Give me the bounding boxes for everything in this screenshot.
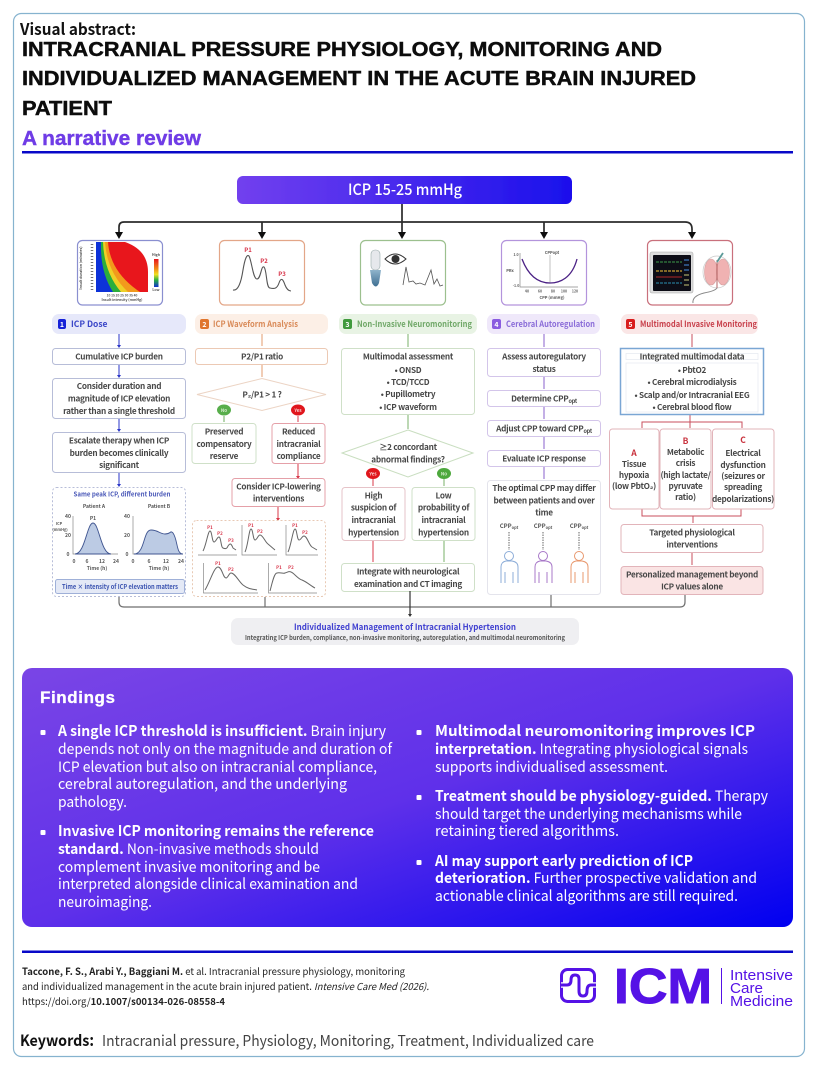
box C: electrical dysfunction: (seizures or bbox=[721, 470, 765, 482]
box: integrated multimodal data: • PbtO2 bbox=[678, 364, 707, 376]
box: adjust CPP: opt bbox=[583, 427, 593, 435]
waveform 3: P2 bbox=[302, 530, 308, 536]
pill: no bbox=[437, 468, 451, 479]
box: multimodal assessment: • TCD/TCCD bbox=[387, 376, 430, 388]
box: optimal CPP may differ bbox=[488, 480, 600, 594]
icon card: ICP waveform: P3 bbox=[278, 269, 286, 278]
header pill 4: 4 bbox=[494, 320, 499, 330]
box: determine CPPopt: Determine CPP bbox=[511, 392, 569, 404]
box: cumulative burden bbox=[52, 348, 186, 364]
finding 2 bbox=[40, 820, 374, 912]
box: low probability bbox=[412, 488, 475, 540]
icon card: CPPopt curve: 1.0 bbox=[513, 253, 519, 258]
box B: metabolic crisis: (high lactate/ bbox=[660, 469, 711, 481]
column 2: ICP waveform analysis bbox=[192, 314, 328, 596]
box: escalate therapy: Escalate therapy when ICP bbox=[69, 434, 170, 446]
chart: patient B: 6 bbox=[148, 558, 151, 565]
box: P2/P1 ratio bbox=[196, 348, 328, 364]
icon card: ICP dose heatmap bbox=[78, 240, 162, 305]
box: adjust CPP: Adjust CPP toward CPP bbox=[496, 422, 583, 434]
panel: waveform examples bbox=[192, 520, 326, 596]
finding 1: cerebral autoregulation, and the underlying bbox=[58, 773, 347, 794]
converging connector to summary bbox=[119, 591, 685, 617]
box C: electrical dysfunction: dysfunction bbox=[720, 459, 766, 471]
chart: patient B: 20 bbox=[124, 532, 130, 539]
citation: and individualized management in the acute brain injured patient. Intensive Care Med (2026). bbox=[22, 979, 429, 993]
waveform 3: P1 bbox=[292, 523, 298, 529]
logo wordmark: ICM bbox=[614, 960, 712, 1014]
waveform 5: P2 bbox=[288, 565, 294, 571]
box: low probability: Low bbox=[436, 490, 452, 502]
heading: findings: Findings bbox=[40, 688, 115, 707]
column 4 arrows bbox=[543, 334, 545, 479]
box: reduced compliance bbox=[272, 424, 325, 464]
column 5: multimodal invasive monitoring bbox=[610, 314, 774, 594]
icon card: ICP dose heatmap: High bbox=[152, 253, 160, 258]
waveform 1 bbox=[198, 525, 237, 555]
box: multimodal assessment: • ONSD bbox=[395, 364, 422, 376]
pill: no: No bbox=[441, 472, 447, 478]
finding 2: interpreted alongside clinical examination and bbox=[58, 873, 358, 894]
logo text: Care bbox=[730, 980, 763, 997]
icon card: ICP waveform: P2 bbox=[260, 256, 268, 265]
box A: tissue hypoxia bbox=[610, 429, 659, 509]
box C: electrical dysfunction bbox=[712, 429, 774, 509]
citation bbox=[22, 964, 429, 1008]
box: personalized management: Personalized management beyond bbox=[626, 568, 758, 580]
summary pill: Integrating ICP burden, compliance, non-invasive monitoring, autoregulation, and multimodal neuromonitoring bbox=[245, 632, 565, 642]
column 3: non-invasive neuromonitoring bbox=[339, 314, 477, 592]
box: personalized management bbox=[621, 566, 763, 594]
finding 3: Multimodal neuromonitoring improves ICP bbox=[435, 720, 755, 741]
column 1 arrows bbox=[117, 334, 121, 487]
column 4: cerebral autoregulation bbox=[487, 314, 600, 594]
box: evaluate response bbox=[488, 450, 600, 466]
person: blue: opt bbox=[512, 525, 519, 531]
box: multimodal assessment: • Pupillometry bbox=[381, 388, 436, 400]
keywords: Keywords: bbox=[20, 1029, 94, 1051]
box: evaluate response: Evaluate ICP response bbox=[502, 452, 586, 464]
chart: patient A: 0 bbox=[73, 558, 76, 565]
box B: metabolic crisis: Metabolic bbox=[667, 446, 705, 458]
finding 4: retaining tiered algorithms. bbox=[435, 820, 619, 841]
finding 5: actionable clinical algorithms are still required. bbox=[435, 885, 738, 906]
decision: P2/P1 > 1 bbox=[197, 378, 326, 410]
box: determine CPPopt bbox=[488, 390, 600, 406]
box: low probability: intracranial bbox=[422, 514, 466, 526]
chart: patient A bbox=[52, 513, 119, 572]
box: high suspicion: High bbox=[365, 490, 382, 502]
callout: time x intensity: Time × intensity of ICP elevation matters bbox=[62, 581, 178, 591]
box: ICP-lowering bbox=[232, 478, 325, 506]
waveform 1: P1 bbox=[207, 525, 213, 531]
box: integrate: Integrate with neurological bbox=[357, 566, 460, 578]
box: targeted interventions: Targeted physiological bbox=[649, 526, 735, 538]
box: high suspicion: intracranial bbox=[352, 514, 396, 526]
header pill 2: 2 bbox=[202, 320, 207, 330]
person: blue bbox=[500, 521, 519, 583]
icon card: ICP dose heatmap: 10 15 20 25 30 35 40 bbox=[107, 292, 137, 298]
box: escalate therapy: significant bbox=[99, 459, 140, 471]
waveform 1: P2 bbox=[217, 531, 223, 537]
waveform 4: P1 bbox=[215, 561, 221, 567]
box: adjust CPP bbox=[488, 420, 600, 436]
top box: ICP range: ICP 15-25 mmHg bbox=[348, 178, 462, 200]
subtitle: A narrative review bbox=[22, 128, 201, 150]
waveform 3 bbox=[286, 523, 318, 555]
header pill 3: 3 bbox=[345, 320, 350, 330]
person: blue: CPP bbox=[500, 521, 512, 530]
header pill 2: ICP Waveform Analysis bbox=[213, 318, 298, 330]
icon card: CPPopt curve: 120 bbox=[572, 290, 578, 294]
header pill 5 bbox=[621, 314, 758, 334]
panel: same peak, different burden: Patient B bbox=[148, 503, 171, 510]
box: ICP-lowering: interventions bbox=[253, 492, 304, 504]
finding 4: Treatment should be physiology-guided. Therapy bbox=[435, 785, 768, 806]
finding 2: standard. Non-invasive methods should bbox=[58, 838, 319, 859]
box C: electrical dysfunction: Electrical bbox=[725, 447, 761, 459]
chart: patient A: (mmHg) bbox=[52, 528, 68, 533]
icon card: ICP dose heatmap: Low bbox=[152, 288, 160, 293]
box: cumulative burden: Cumulative ICP burden bbox=[75, 350, 163, 362]
box: multimodal assessment: • ICP waveform bbox=[379, 401, 437, 413]
finding 3: supports individualised assessment. bbox=[435, 756, 668, 777]
chart: patient A: 12 bbox=[99, 558, 105, 565]
box C: electrical dysfunction: C bbox=[740, 434, 746, 446]
waveform 1: P3 bbox=[228, 538, 234, 544]
branching arrows from top box bbox=[115, 204, 696, 239]
icon card: ICP dose heatmap: Insult intensity (mmHg) bbox=[102, 298, 143, 303]
chart: patient A: 40 bbox=[65, 513, 71, 520]
header pill 3 bbox=[339, 314, 477, 334]
box: duration and magnitude: magnitude of ICP elevation bbox=[68, 392, 170, 404]
chart: patient A: P1 bbox=[90, 515, 96, 522]
waveform 2: P1 bbox=[248, 523, 254, 529]
chart: patient B: 40 bbox=[124, 513, 130, 520]
icon card: monitor and brain bbox=[648, 240, 732, 305]
citation: https://doi.org/10.1007/s00134-026-08558-4 bbox=[22, 994, 225, 1008]
pill: yes bbox=[366, 468, 380, 479]
header pill 4: Cerebral Autoregulation bbox=[506, 318, 595, 330]
pill: no bbox=[217, 404, 231, 416]
box: integrated multimodal data: • Scalp and/or Intracranial EEG bbox=[635, 389, 750, 401]
box: determine CPPopt: opt bbox=[569, 397, 578, 405]
box: multimodal assessment: Multimodal assessment bbox=[363, 350, 454, 362]
icon card: ultrasound probe, eye and waveform bbox=[360, 240, 446, 305]
icon card: ICP waveform bbox=[220, 240, 304, 305]
box A: tissue hypoxia: (low PbtO₂) bbox=[612, 480, 656, 492]
box: integrated multimodal data: • Cerebral blood flow bbox=[653, 401, 732, 413]
waveform 5 bbox=[268, 563, 317, 593]
header pill 2 bbox=[195, 314, 328, 334]
column 5 arrows bbox=[642, 334, 742, 565]
column 3 arrows bbox=[373, 334, 444, 562]
box: duration and magnitude bbox=[52, 378, 186, 418]
finding 1: pathology. bbox=[58, 791, 127, 812]
box C: electrical dysfunction: spreading bbox=[724, 481, 762, 493]
column 2 arrows bbox=[224, 334, 300, 521]
box: integrated multimodal data bbox=[620, 348, 764, 414]
citation: Taccone, F. S., Arabi Y., Baggiani M. et al. Intracranial pressure physiology, monitoring bbox=[22, 964, 406, 978]
box: escalate therapy bbox=[52, 432, 186, 472]
header: visual abstract label and title bbox=[19, 16, 696, 150]
box: multimodal assessment bbox=[342, 348, 474, 414]
chart: patient A: Time (h) bbox=[87, 565, 107, 572]
icon card: CPPopt curve: CPP (mmHg) bbox=[539, 295, 565, 301]
finding 4 bbox=[416, 785, 768, 841]
finding 5: deterioration. Further prospective validation and bbox=[435, 867, 757, 888]
finding 3 bbox=[416, 720, 755, 777]
icon card: CPPopt curve: 60 bbox=[538, 290, 542, 294]
box C: electrical dysfunction: depolarizations) bbox=[712, 493, 774, 505]
header pill 1: 1 bbox=[60, 320, 64, 330]
pill: yes: Yes bbox=[293, 408, 302, 414]
flowchart bbox=[52, 176, 774, 645]
person: orange: CPP bbox=[570, 521, 582, 530]
box: low probability: probability of bbox=[418, 502, 470, 514]
box: preserved reserve: reserve bbox=[210, 450, 239, 462]
finding 1 bbox=[40, 720, 393, 812]
box: integrate: examination and CT imaging bbox=[354, 578, 462, 590]
box: reduced compliance: compliance bbox=[277, 450, 321, 462]
panel: same peak, different burden bbox=[52, 488, 186, 596]
header pill 4 bbox=[487, 314, 600, 334]
box: duration and magnitude: rather than a single threshold bbox=[63, 405, 175, 417]
box: targeted interventions: interventions bbox=[666, 538, 718, 550]
box: integrated multimodal data: Integrated multimodal data bbox=[640, 350, 745, 362]
icon card: CPPopt curve: 80 bbox=[551, 290, 555, 294]
icon card: CPPopt curve: -1.0 bbox=[513, 284, 519, 289]
box B: metabolic crisis: pyruvate bbox=[669, 480, 703, 492]
chart: patient B: 24 bbox=[178, 558, 184, 565]
chart: patient B bbox=[124, 513, 184, 572]
finding 4: should target the underlying mechanisms while bbox=[435, 803, 742, 824]
decision: concordant findings bbox=[342, 430, 473, 477]
box A: tissue hypoxia: hypoxia bbox=[619, 469, 650, 481]
box: reduced compliance: intracranial bbox=[277, 438, 321, 450]
icon card: CPPopt curve: CPPopt bbox=[545, 250, 560, 256]
box A: tissue hypoxia: A bbox=[630, 447, 637, 459]
logo text: Medicine bbox=[730, 993, 793, 1010]
waveform 2 bbox=[242, 523, 277, 555]
panel: findings bbox=[22, 668, 793, 927]
box: optimal CPP may differ: between patients and over bbox=[493, 494, 595, 506]
icon card: CPPopt curve: PRx bbox=[506, 268, 515, 274]
box: assess status bbox=[488, 348, 600, 376]
header pill 5: 5 bbox=[628, 320, 633, 330]
box B: metabolic crisis: ratio) bbox=[675, 491, 696, 503]
finding 2: neuroimaging. bbox=[58, 891, 152, 912]
waveform 5: P1 bbox=[276, 565, 282, 571]
panel: same peak, different burden: Same peak ICP, different burden bbox=[74, 488, 170, 498]
header pill 5: Multimodal Invasive Monitoring bbox=[640, 318, 757, 330]
box B: metabolic crisis bbox=[660, 429, 711, 509]
logo text bbox=[730, 967, 793, 1010]
top box: ICP range bbox=[237, 176, 572, 204]
decision: P2/P1 > 1: P₂/P1 > 1 ? bbox=[242, 388, 282, 400]
box: low probability: hypertension bbox=[418, 526, 469, 538]
title line 1: INTRACRANIAL PRESSURE PHYSIOLOGY, MONITORING AND bbox=[22, 39, 662, 61]
box B: metabolic crisis: crisis bbox=[676, 457, 695, 469]
box: optimal CPP may differ: The optimal CPP may differ bbox=[492, 482, 596, 494]
pill: yes bbox=[291, 404, 305, 416]
box: P2/P1 ratio: P2/P1 ratio bbox=[241, 350, 283, 362]
finding 2: Invasive ICP monitoring remains the reference bbox=[58, 820, 374, 841]
chart: patient B: 12 bbox=[163, 558, 169, 565]
person: orange bbox=[570, 521, 589, 583]
box: escalate therapy: burden becomes clinically bbox=[70, 447, 169, 459]
finding 3: interpretation. Integrating physiological signals bbox=[435, 738, 748, 759]
chart: patient B: 0 bbox=[126, 551, 129, 558]
panel: same peak, different burden: Patient A bbox=[83, 503, 106, 510]
waveform 4 bbox=[204, 561, 258, 593]
box B: metabolic crisis: B bbox=[683, 435, 689, 447]
box: ICP-lowering: Consider ICP-lowering bbox=[236, 480, 321, 492]
pill: yes: Yes bbox=[368, 472, 377, 478]
finding 1: A single ICP threshold is insufficient. Brain injury bbox=[57, 720, 386, 741]
chart: patient A: ICP bbox=[56, 522, 63, 527]
keywords: Intracranial pressure, Physiology, Monitoring, Treatment, Individualized care bbox=[102, 1030, 594, 1051]
chart: patient B: 0 bbox=[132, 558, 135, 565]
box: preserved reserve: compensatory bbox=[197, 438, 252, 450]
logo: ICM Intensive Care Medicine bbox=[561, 960, 793, 1014]
chart: patient A: 24 bbox=[113, 558, 119, 565]
box: assess status: Assess autoregulatory bbox=[501, 350, 586, 362]
box: reduced compliance: Reduced bbox=[282, 426, 315, 438]
summary pill: Individualized Management of Intracranial Hypertension bbox=[294, 621, 516, 633]
icon card: CPPopt curve bbox=[502, 240, 586, 305]
header pill 1: ICP Dose bbox=[71, 318, 108, 330]
box: assess status: status bbox=[532, 363, 556, 375]
chart: patient A: 20 bbox=[65, 532, 71, 539]
title line 2: INDIVIDUALIZED MANAGEMENT IN THE ACUTE BRAIN INJURED bbox=[22, 68, 696, 90]
box: high suspicion: suspicion of bbox=[351, 502, 397, 514]
waveform 2: P2 bbox=[257, 529, 263, 535]
box: personalized management: ICP values alone bbox=[661, 580, 723, 592]
box: high suspicion bbox=[342, 488, 405, 540]
summary pill bbox=[231, 618, 579, 645]
icon card: CPPopt curve: 100 bbox=[561, 290, 567, 294]
box: integrated multimodal data: • Cerebral microdialysis bbox=[648, 376, 737, 388]
box: high suspicion: hypertension bbox=[348, 526, 399, 538]
waveform 4: P2 bbox=[228, 567, 234, 573]
finding 1: depends not only on the magnitude and duration of bbox=[58, 738, 393, 759]
person: purple: opt bbox=[546, 525, 553, 531]
title line 3: PATIENT bbox=[22, 98, 112, 120]
box: preserved reserve: Preserved bbox=[205, 426, 243, 438]
icon card: ICP dose heatmap: Insult duration (minutes) bbox=[79, 246, 84, 290]
box: targeted interventions bbox=[621, 524, 763, 552]
person: orange: opt bbox=[582, 525, 589, 531]
chart: patient B: Time (h) bbox=[149, 565, 169, 572]
decision: concordant findings: ≥2 concordant bbox=[379, 441, 438, 453]
logo icon bbox=[561, 970, 596, 1002]
pill: no: No bbox=[221, 408, 227, 414]
box: duration and magnitude: Consider duration and bbox=[77, 380, 161, 392]
header pill 3: Non-Invasive Neuromonitoring bbox=[357, 318, 472, 330]
box: preserved reserve bbox=[192, 424, 256, 464]
chart: patient A: 0 bbox=[67, 551, 70, 558]
finding 5 bbox=[416, 850, 757, 906]
person: purple: CPP bbox=[534, 521, 546, 530]
finding 2: complement invasive monitoring and be bbox=[58, 856, 320, 877]
finding 5: AI may support early prediction of ICP bbox=[434, 850, 693, 871]
finding 1: ICP elevation but also on intracranial compliance, bbox=[58, 756, 377, 777]
column 1: ICP dose bbox=[52, 314, 186, 596]
icon card: ICP waveform: P1 bbox=[244, 245, 252, 254]
decision: concordant findings: abnormal findings? bbox=[371, 454, 445, 466]
box: integrate bbox=[342, 564, 474, 592]
box A: tissue hypoxia: Tissue bbox=[622, 458, 647, 470]
header pill 1 bbox=[52, 314, 186, 334]
icon card: CPPopt curve: 40 bbox=[525, 290, 529, 294]
person: purple bbox=[534, 521, 553, 583]
box: optimal CPP may differ: time bbox=[535, 506, 553, 518]
chart: patient A: 6 bbox=[86, 558, 89, 565]
logo text: Intensive bbox=[730, 967, 793, 984]
label: visual abstract: Visual abstract: bbox=[19, 16, 136, 40]
